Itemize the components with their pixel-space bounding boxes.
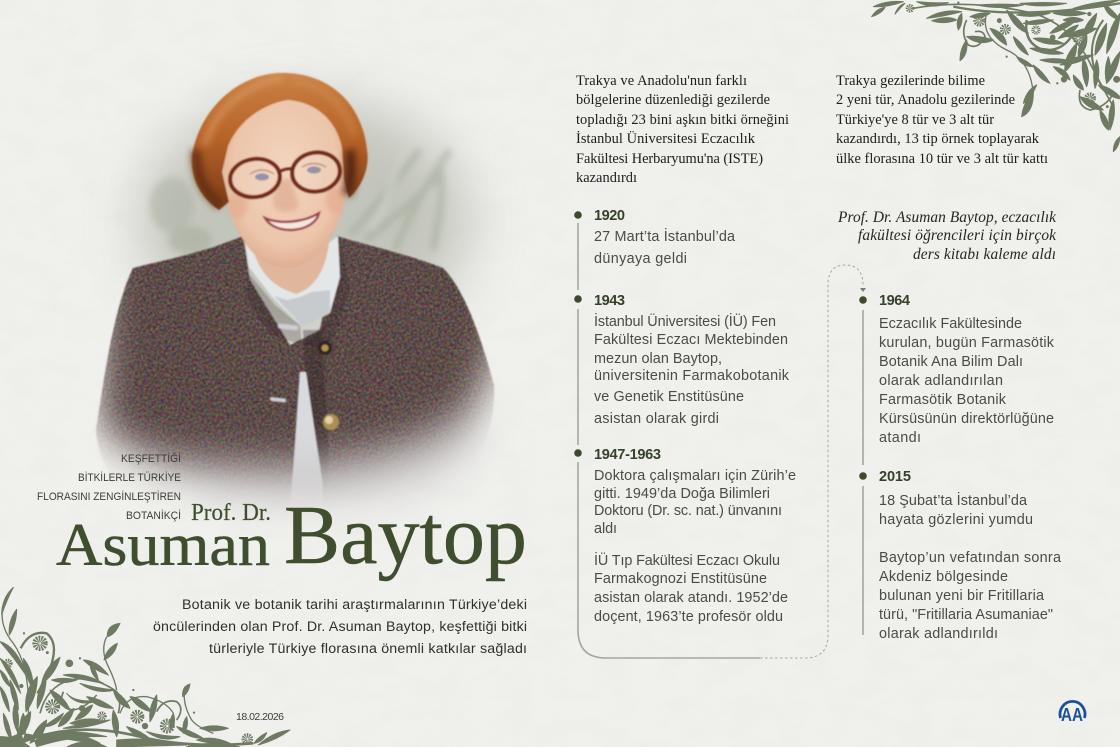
timeline entry: 1947-1963: asistan olarak atandı. 1952’de: [594, 590, 788, 606]
timeline entry: 2015: 18 Şubat’ta İstanbul’da: [879, 491, 1027, 509]
timeline entry: 1947-1963: gitti. 1949’da Doğa Bilimleri: [594, 486, 770, 502]
text block: herbarium collection: Trakya ve Anadolu'nun farklı: [576, 73, 747, 89]
text block: herbarium collection: topladığı 23 bini aşkın bitki örneğini: [576, 112, 789, 128]
timeline entry: 2015: 2015: [879, 469, 911, 485]
hair: [192, 73, 368, 210]
text block: new species: 2 yeni tür, Anadolu gezilerinde: [836, 92, 1015, 108]
title: name: Prof. Dr.: [191, 500, 271, 526]
text block: new species: ülke florasına 10 tür ve 3 alt tür kattı: [836, 151, 1048, 167]
text block: new species: Trakya gezilerinde bilime: [836, 73, 985, 89]
timeline entry: 1947-1963: doçent, 1963’te profesör oldu: [594, 609, 783, 625]
denser foliage: [0, 658, 203, 743]
text block: new species: Türkiye'ye 8 tür ve 3 alt tür: [836, 112, 994, 128]
date: 18.02.2026: [236, 711, 284, 723]
timeline entry: 1943: mezun olan Baytop,: [594, 351, 722, 367]
timeline entry: 1947-1963: 1947-1963: [594, 447, 661, 463]
eyes and glasses: [255, 173, 269, 181]
neck and face: [254, 240, 330, 294]
timeline entry: 2015: hayata gözlerini yumdu: [879, 512, 1033, 528]
title: name: Asuman: [56, 512, 270, 578]
mouth: [265, 213, 319, 230]
icon: Anadolu Agency logo: AA: [1061, 705, 1083, 725]
timeline entry: 1947-1963: aldı: [594, 521, 617, 537]
italic quote: Prof. Dr. Asuman Baytop, eczacılık: [837, 209, 1057, 226]
timeline entry: 1947-1963: İÜ Tıp Fakültesi Eczacı Okulu: [594, 551, 780, 569]
timeline entry: 1943: İstanbul Üniversitesi (İÜ) Fen: [594, 312, 776, 330]
timeline entry: 1964: Botanik Ana Bilim Dalı: [879, 354, 1023, 370]
tagline: BİTKİLERLE TÜRKİYE: [78, 471, 181, 484]
timeline entry: 2015: türü, "Fritillaria Asumaniae": [879, 607, 1053, 623]
timeline connector: [578, 223, 866, 658]
timeline entry: 1964: [879, 293, 1055, 446]
timeline entry: 2015: olarak adlandırıldı: [879, 626, 998, 642]
intro paragraph: türleriyle Türkiye florasına önemli katkılar sağladı: [209, 641, 527, 657]
tagline: BOTANİKÇİ: [126, 509, 181, 522]
intro paragraph: Botanik ve botanik tarihi araştırmalarının Türkiye’deki: [182, 597, 527, 613]
timeline entry: 2015: bulunan yeni bir Fritillaria: [879, 588, 1044, 604]
timeline entry: 1964: Eczacılık Fakültesinde: [879, 316, 1022, 332]
tagline: FLORASINI ZENGİNLEŞTİREN: [37, 490, 181, 503]
timeline entry: 1943: asistan olarak girdi: [594, 411, 719, 427]
text block: herbarium collection: [576, 73, 789, 186]
timeline entry: 1920: 1920: [594, 208, 625, 224]
intro paragraph: öncülerinden olan Prof. Dr. Asuman Baytop, keşfettiği bitki: [153, 619, 527, 635]
timeline entry: 1920: [594, 208, 735, 267]
timeline entry: 1947-1963: Farmakognozi Enstitüsüne: [594, 571, 767, 587]
timeline entry: 1920: dünyaya geldi: [594, 251, 687, 267]
timeline entry: 1964: 1964: [879, 293, 911, 309]
text block: herbarium collection: bölgelerine düzenlediği gezilerde: [576, 92, 770, 108]
portrait photograph of Prof. Dr. Asuman Baytop: [96, 73, 494, 530]
timeline entry: 1943: Fakültesi Eczacı Mektebinden: [594, 332, 788, 348]
timeline entry: 1964: Kürsüsünün direktörlüğüne: [879, 411, 1054, 427]
title: name: [56, 489, 527, 582]
text block: herbarium collection: İstanbul Üniversitesi Eczacılık: [576, 130, 756, 147]
timeline entry: 1964: olarak adlandırılan: [879, 373, 1003, 389]
timeline entry: 1947-1963: Doktora çalışmaları için Zürih’e: [594, 468, 796, 484]
timeline entry: 1947-1963: Doktoru (Dr. sc. nat.) ünvanını: [594, 503, 782, 519]
italic quote: fakültesi öğrencileri için birçok: [858, 227, 1057, 244]
timeline entry: 1943: [594, 293, 790, 427]
jacket: [96, 236, 495, 497]
buttons: [323, 414, 339, 430]
timeline entry: 2015: Baytop’un vefatından sonra: [879, 550, 1061, 566]
timeline entry: 1943: üniversitenin Farmakobotanik: [594, 368, 790, 384]
timeline entry: 1920: 27 Mart’ta İstanbul’da: [594, 227, 735, 245]
tagline: [37, 452, 181, 522]
timeline entry: 1947-1963: [594, 447, 796, 625]
italic quote: [837, 209, 1057, 263]
timeline dots: [574, 211, 867, 480]
text block: new species: [836, 73, 1048, 167]
text block: new species: kazandırdı, 13 tip örnek toplayarak: [836, 131, 1040, 147]
timeline entry: 1964: kurulan, bugün Farmasötik: [879, 335, 1055, 351]
intro paragraph: [153, 597, 527, 657]
timeline entry: 2015: Akdeniz bölgesinde: [879, 569, 1008, 585]
title: name: Baytop: [284, 489, 527, 582]
timeline entry: 1964: atandı: [879, 430, 921, 446]
italic quote: ders kitabı kaleme aldı: [913, 246, 1056, 263]
denser foliage: [970, 3, 1120, 130]
text block: herbarium collection: Fakültesi Herbaryumu'na (ISTE): [576, 151, 763, 167]
ornament: floral corner bottom left: [0, 587, 290, 747]
timeline entry: 1943: ve Genetik Enstitüsüne: [594, 389, 744, 405]
tagline: KEŞFETTİĞİ: [121, 452, 181, 465]
shirt: [245, 236, 340, 327]
timeline entry: 1943: 1943: [594, 293, 625, 309]
ornament: floral corner top right: [872, 0, 1120, 152]
timeline entry: 1964: Farmasötik Botanik: [879, 392, 1007, 408]
text block: herbarium collection: kazandırdı: [576, 170, 637, 186]
timeline entry: 2015: [879, 469, 1061, 642]
